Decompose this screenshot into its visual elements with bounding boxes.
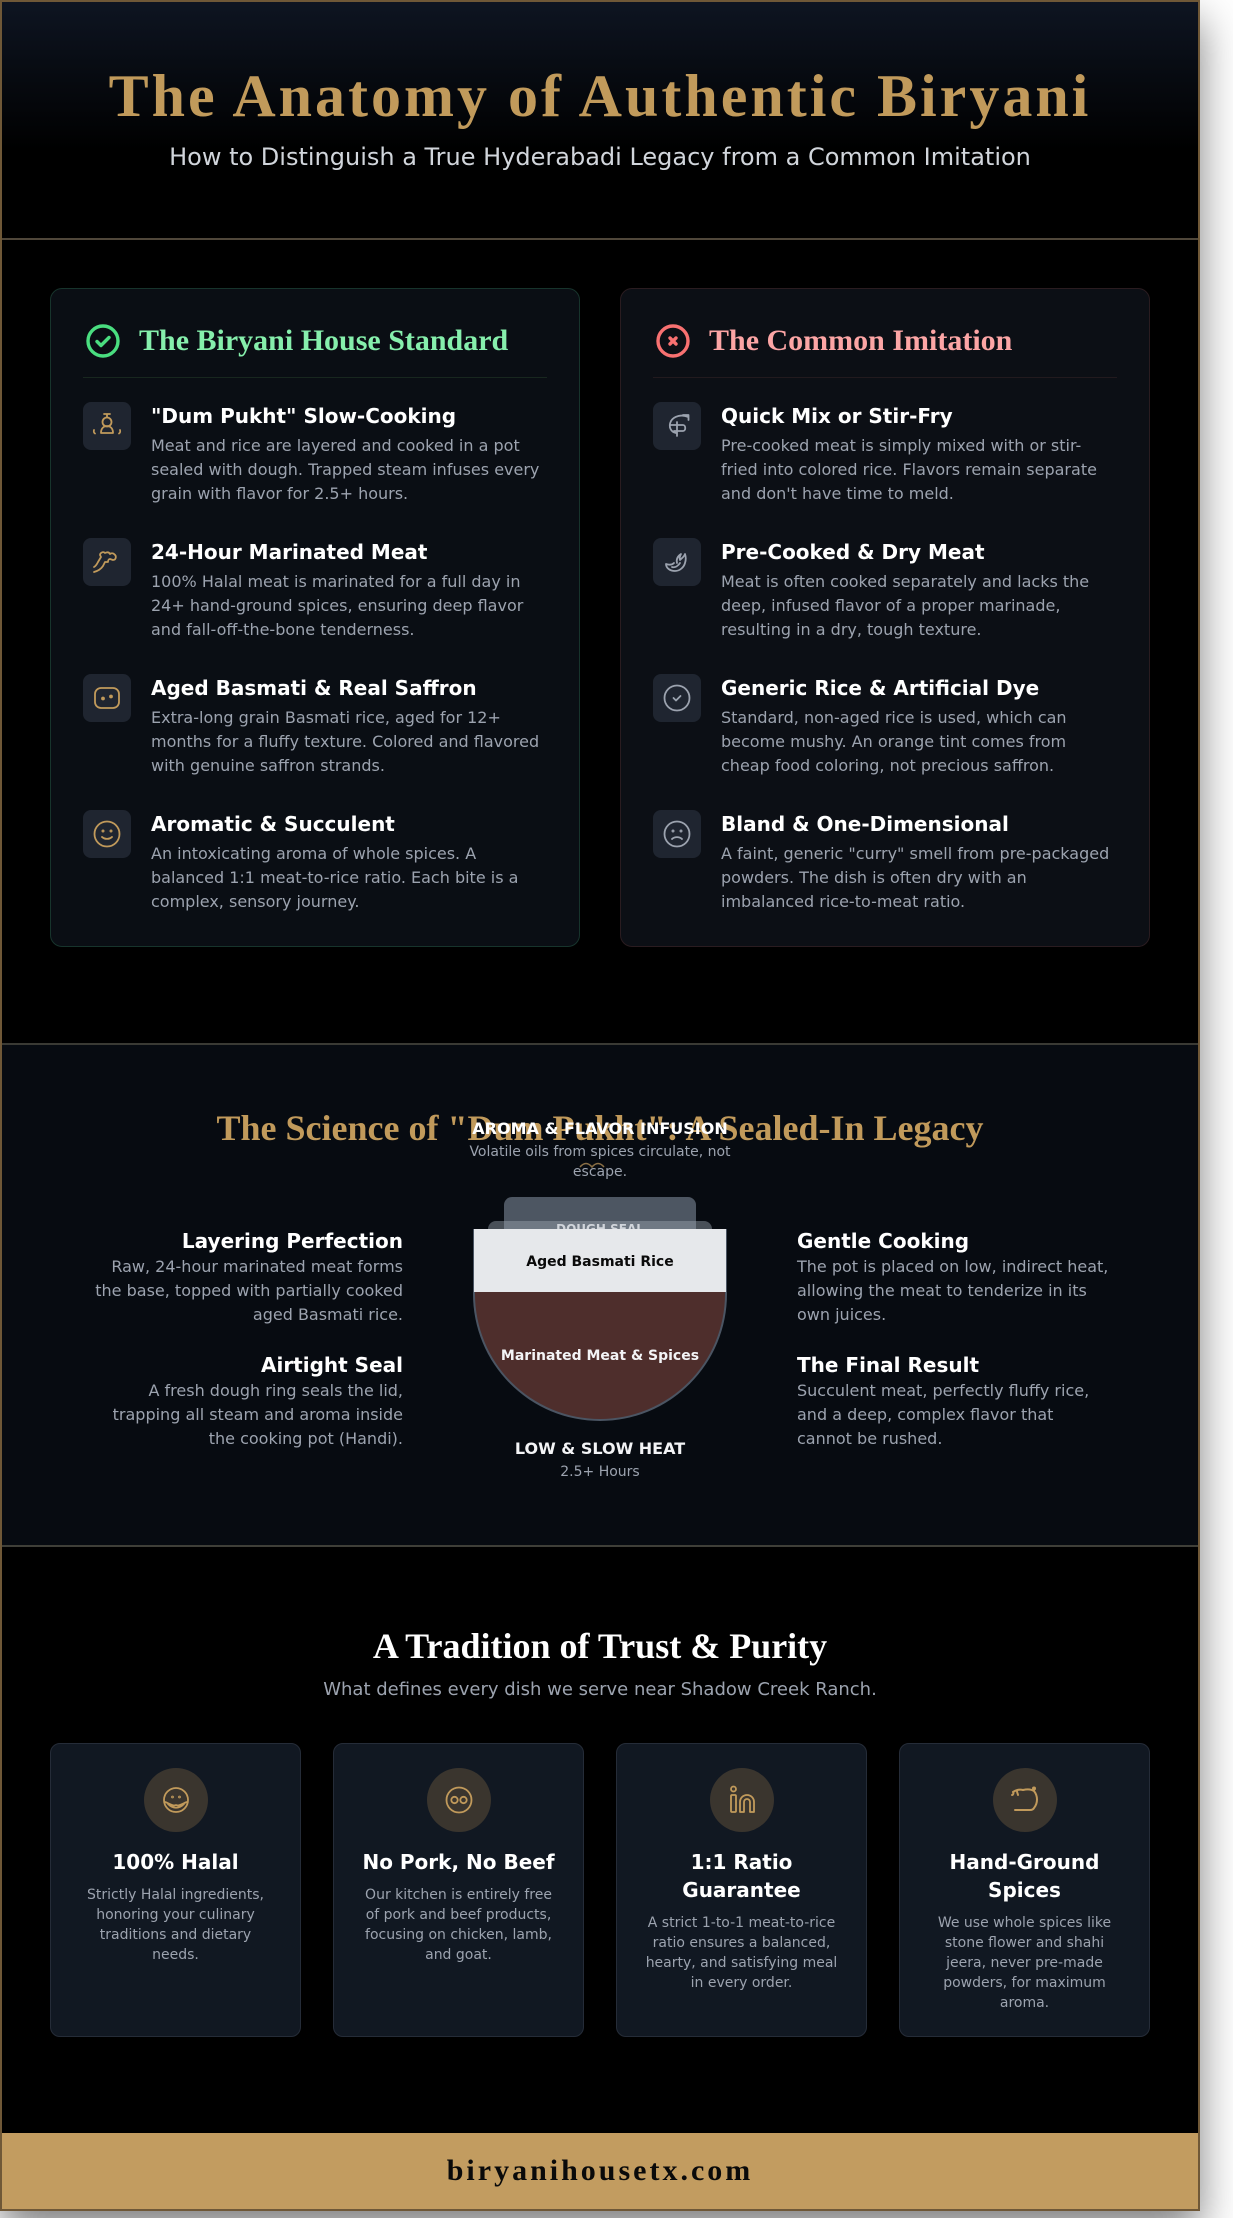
aroma description: Volatile oils from spices circulate, not — [469, 1144, 731, 1160]
card text: needs. — [152, 1947, 199, 1963]
icon: stir — [653, 402, 701, 450]
heat label — [515, 1439, 686, 1480]
item: pre-cooked — [653, 538, 1089, 639]
item description: An intoxicating aroma of whole spices. A — [151, 844, 476, 863]
step text: Succulent meat, perfectly fluffy rice, — [797, 1381, 1089, 1400]
trust subtitle: What defines every dish we serve near Shadow Creek Ranch. — [323, 1679, 877, 1700]
icon: dry meat — [653, 538, 701, 586]
step text — [796, 1257, 1108, 1324]
item title: Aromatic & Succulent — [151, 812, 395, 836]
card title: No Pork, No Beef — [362, 1850, 555, 1874]
subtitle: How to Distinguish a True Hyderabadi Legacy from a Common Imitation — [169, 143, 1031, 171]
card title — [682, 1850, 801, 1902]
step title: Gentle Cooking — [797, 1229, 969, 1253]
rice layer — [474, 1229, 726, 1292]
item: basmati — [83, 674, 539, 775]
step text: own juices. — [797, 1305, 886, 1324]
item description: balanced 1:1 meat-to-rice ratio. Each bite is a — [151, 868, 518, 887]
item description — [721, 436, 1097, 503]
icon: frown — [653, 810, 701, 858]
item description: powders. The dish is often dry with an — [721, 868, 1027, 887]
step title: Airtight Seal — [261, 1353, 403, 1377]
icon: smile — [83, 810, 131, 858]
lid — [504, 1197, 696, 1237]
header band — [0, 0, 1200, 240]
item: marinated meat — [83, 538, 524, 639]
card text: Strictly Halal ingredients, — [87, 1887, 264, 1903]
step text: aged Basmati rice. — [253, 1305, 403, 1324]
card text: jeera, never pre-made — [946, 1955, 1103, 1971]
item: generic rice — [653, 674, 1067, 775]
card text: focusing on chicken, lamb, — [365, 1927, 552, 1943]
icon: no pork snout — [427, 1768, 491, 1832]
step text: the base, topped with partially cooked — [95, 1281, 403, 1300]
card text: A strict 1-to-1 meat-to-rice — [648, 1915, 835, 1931]
item title: Pre-Cooked & Dry Meat — [721, 540, 985, 564]
item description — [151, 436, 539, 503]
item description: and fall-off-the-bone tenderness. — [151, 620, 415, 639]
step text: A fresh dough ring seals the lid, — [148, 1381, 403, 1400]
handi pot diagram — [473, 1197, 727, 1421]
card: no pork — [333, 1743, 584, 2037]
icon: drumstick — [83, 538, 131, 586]
icon: halal badge — [144, 1768, 208, 1832]
panel heading: The Biryani House Standard — [139, 324, 508, 357]
step text — [95, 1257, 403, 1324]
card text — [87, 1887, 264, 1963]
steam arcs — [580, 1162, 604, 1168]
pot body — [473, 1229, 727, 1421]
panel: The Common Imitation — [620, 288, 1150, 947]
item description: 24+ hand-ground spices, ensuring deep flavor — [151, 596, 523, 615]
card title: Guarantee — [682, 1878, 801, 1902]
icon: pot — [83, 402, 131, 450]
item title: Bland & One-Dimensional — [721, 812, 1009, 836]
item description: Standard, non-aged rice is used, which can — [721, 708, 1067, 727]
heat heading: LOW & SLOW HEAT — [515, 1439, 685, 1458]
item title: "Dum Pukht" Slow-Cooking — [151, 404, 456, 428]
item title: 24-Hour Marinated Meat — [151, 540, 427, 564]
card text — [938, 1915, 1111, 2011]
item description: cheap food coloring, not precious saffron. — [721, 756, 1054, 775]
section heading: The Science of "Dum Pukht": A Sealed-In Legacy — [216, 1108, 984, 1148]
card text: stone flower and shahi — [945, 1935, 1104, 1951]
step text: allowing the meat to tenderize in its — [797, 1281, 1087, 1300]
item description: resulting in a dry, tough texture. — [721, 620, 982, 639]
icon: red x circle — [656, 324, 690, 358]
step text — [797, 1381, 1089, 1448]
panel heading: The Common Imitation — [709, 324, 1012, 357]
step: layering — [95, 1229, 403, 1324]
step: gentle — [796, 1229, 1108, 1324]
card text: ratio ensures a balanced, — [653, 1935, 830, 1951]
card title: Hand-Ground — [950, 1850, 1099, 1874]
step text — [113, 1381, 403, 1448]
icon: green check circle — [86, 324, 120, 358]
card title: 1:1 Ratio — [691, 1850, 792, 1874]
item: bland — [653, 810, 1109, 911]
item description: fried into colored rice. Flavors remain separate — [721, 460, 1097, 479]
item description: months for a fluffy texture. Colored and flavored — [151, 732, 539, 751]
item description: and don't have time to meld. — [721, 484, 954, 503]
item description: deep, infused flavor of a proper marinade, — [721, 596, 1060, 615]
aroma heading: AROMA & FLAVOR INFUSION — [472, 1119, 728, 1138]
trust heading: A Tradition of Trust & Purity — [373, 1626, 827, 1666]
icon: ratio — [710, 1768, 774, 1832]
step title: Layering Perfection — [182, 1229, 403, 1253]
step text: the cooking pot (Handi). — [209, 1429, 403, 1448]
item title: Aged Basmati & Real Saffron — [151, 676, 477, 700]
card text: powders, for maximum — [943, 1975, 1106, 1991]
card text: in every order. — [691, 1975, 792, 1991]
panel: science of Dum Pukht — [0, 1043, 1200, 1547]
card title: Spices — [988, 1878, 1061, 1902]
card: halal — [50, 1743, 301, 2037]
item description: 100% Halal meat is marinated for a full day in — [151, 572, 520, 591]
card text: hearty, and satisfying meal — [646, 1955, 837, 1971]
item: aromatic — [83, 810, 518, 911]
step text: cannot be rushed. — [797, 1429, 942, 1448]
card text — [646, 1915, 837, 1991]
step text: Raw, 24-hour marinated meat forms — [111, 1257, 403, 1276]
item description: Extra-long grain Basmati rice, aged for 12+ — [151, 708, 501, 727]
aroma description: escape. — [573, 1164, 627, 1180]
rice layer: Aged Basmati Rice — [526, 1254, 674, 1270]
card text: We use whole spices like — [938, 1915, 1111, 1931]
dough seal label: DOUGH SEAL — [556, 1222, 644, 1236]
dough seal — [488, 1221, 712, 1241]
icon: mortar — [993, 1768, 1057, 1832]
step text: The pot is placed on low, indirect heat, — [797, 1257, 1108, 1276]
card: ratio — [616, 1743, 867, 2037]
icon: check circle — [653, 674, 701, 722]
item description — [151, 708, 539, 775]
item description: A faint, generic "curry" smell from pre-packaged — [721, 844, 1109, 863]
item description — [721, 572, 1089, 639]
aroma description — [469, 1144, 731, 1180]
step text: and a deep, complex flavor that — [797, 1405, 1053, 1424]
footer bar — [0, 2133, 1200, 2211]
heat duration: 2.5+ Hours — [560, 1464, 640, 1480]
item description: Meat and rice are layered and cooked in a pot — [151, 436, 520, 455]
aroma label — [469, 1119, 731, 1180]
card text: Our kitchen is entirely free — [365, 1887, 552, 1903]
item title: Quick Mix or Stir-Fry — [721, 404, 953, 428]
item description: Pre-cooked meat is simply mixed with or stir- — [721, 436, 1081, 455]
icon: grain face — [83, 674, 131, 722]
title: The Anatomy of Authentic Biryani — [109, 63, 1091, 129]
item description: with genuine saffron strands. — [151, 756, 385, 775]
footer website: biryanihousetx.com — [447, 2154, 753, 2187]
step title: The Final Result — [797, 1353, 979, 1377]
item title: Generic Rice & Artificial Dye — [721, 676, 1039, 700]
card text: of pork and beef products, — [366, 1907, 551, 1923]
item: quick mix — [653, 402, 1097, 503]
card text: aroma. — [1000, 1995, 1049, 2011]
card text: and goat. — [425, 1947, 492, 1963]
card title: 100% Halal — [112, 1850, 239, 1874]
item description: become mushy. An orange tint comes from — [721, 732, 1066, 751]
panel: The Biryani House Standard — [50, 288, 580, 947]
meat layer: Marinated Meat & Spices — [501, 1348, 699, 1364]
item description: complex, sensory journey. — [151, 892, 359, 911]
step text: trapping all steam and aroma inside — [113, 1405, 403, 1424]
item description: sealed with dough. Trapped steam infuses every — [151, 460, 539, 479]
card text: honoring your culinary — [96, 1907, 255, 1923]
step: seal — [113, 1353, 403, 1448]
item description — [721, 844, 1109, 911]
card: spices — [899, 1743, 1150, 2037]
item description — [721, 708, 1067, 775]
card text: traditions and dietary — [100, 1927, 251, 1943]
card text — [365, 1887, 552, 1963]
item description: Meat is often cooked separately and lacks the — [721, 572, 1089, 591]
item description: grain with flavor for 2.5+ hours. — [151, 484, 408, 503]
item: Dum Pukht — [83, 402, 539, 503]
step: result — [797, 1353, 1089, 1448]
item description — [151, 572, 524, 639]
item description: imbalanced rice-to-meat ratio. — [721, 892, 965, 911]
item description — [151, 844, 518, 911]
card title — [950, 1850, 1099, 1902]
